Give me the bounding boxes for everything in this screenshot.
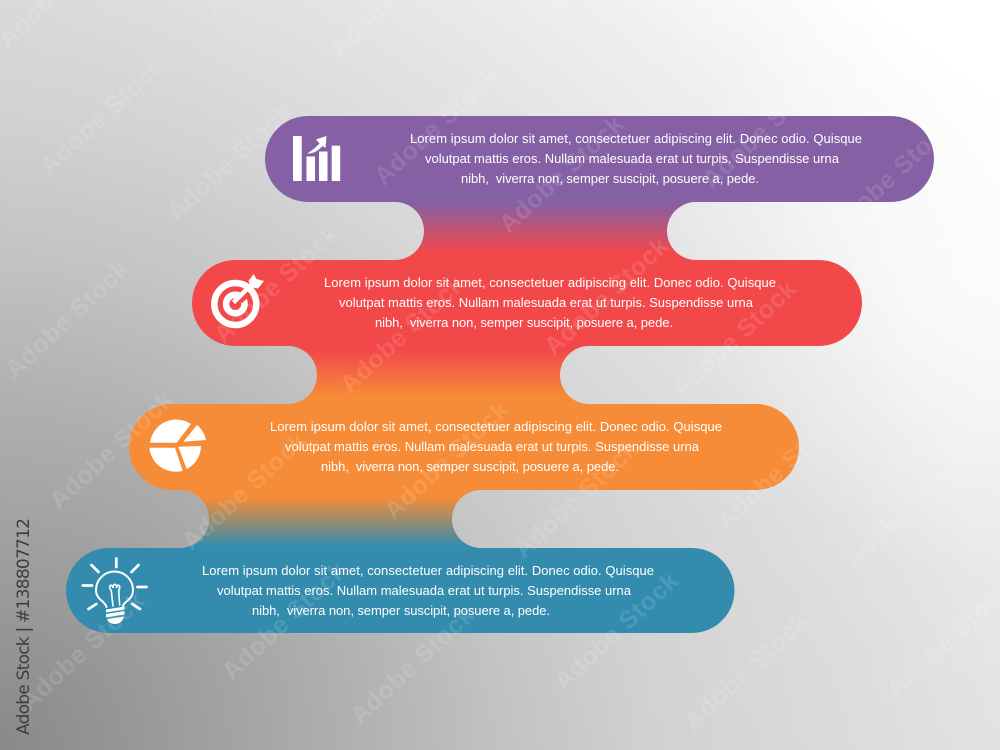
panel 3 text: Lorem ipsum dolor sit amet, consectetuer adipiscing elit. Donec odio. Quisque xyxy=(270,419,722,434)
watermarks: Adobe Stock xyxy=(697,65,832,194)
panel 1 text: nibh, viverra non, semper suscipit, posuere a, pede. xyxy=(461,171,759,186)
watermarks: Adobe Stock xyxy=(494,110,629,239)
panel 3 text: volutpat mattis eros. Nullam malesuada erat ut turpis. Suspendisse urna xyxy=(285,439,700,454)
stock id label: Adobe Stock | #138807712 xyxy=(14,518,34,735)
panel 1 text xyxy=(410,131,862,186)
watermarks: Adobe Stock xyxy=(539,232,674,361)
panel 1 text: volutpat mattis eros. Nullam malesuada erat ut turpis. Suspendisse urna xyxy=(425,151,840,166)
watermarks: Adobe Stock xyxy=(162,98,297,227)
panel 4 text: nibh, viverra non, semper suscipit, posuere a, pede. xyxy=(252,603,550,618)
watermarks: Adobe Stock xyxy=(379,396,514,525)
watermarks: Adobe Stock xyxy=(217,557,352,686)
watermarks: Adobe Stock xyxy=(15,587,150,716)
watermarks: Adobe Stock xyxy=(509,435,644,564)
watermarks: Adobe Stock xyxy=(44,386,179,515)
icon: light bulb xyxy=(83,558,146,624)
panel 2 text xyxy=(324,275,776,330)
panel 3 text: nibh, viverra non, semper suscipit, posuere a, pede. xyxy=(321,459,619,474)
icon: target with arrow xyxy=(214,274,264,325)
watermarks: Adobe Stock xyxy=(679,607,814,736)
watermarks: Adobe Stock xyxy=(549,567,684,696)
watermarks: Adobe Stock xyxy=(335,270,470,399)
panel 2 text: volutpat mattis eros. Nullam malesuada erat ut turpis. Suspendisse urna xyxy=(339,295,754,310)
watermarks: Adobe Stock xyxy=(839,446,974,575)
watermarks: Adobe Stock xyxy=(209,220,344,349)
watermarks: Adobe Stock xyxy=(345,601,480,730)
panel 2 text: Lorem ipsum dolor sit amet, consectetuer adipiscing elit. Donec odio. Quisque xyxy=(324,275,776,290)
watermarks: Adobe Stock xyxy=(0,255,135,384)
watermarks: Adobe Stock xyxy=(667,275,802,404)
icon: pie chart xyxy=(149,420,206,472)
panel 3 text xyxy=(270,419,722,474)
watermarks: Adobe Stock xyxy=(177,427,312,556)
panel 4 text: Lorem ipsum dolor sit amet, consectetuer adipiscing elit. Donec odio. Quisque xyxy=(202,563,654,578)
panel 2 text: nibh, viverra non, semper suscipit, posuere a, pede. xyxy=(375,315,673,330)
stacked ribbon shape xyxy=(66,116,934,633)
panel 4 text: volutpat mattis eros. Nullam malesuada erat ut turpis. Suspendisse urna xyxy=(217,583,632,598)
watermarks: Adobe Stock xyxy=(369,62,504,191)
panel 1 text: Lorem ipsum dolor sit amet, consectetuer adipiscing elit. Donec odio. Quisque xyxy=(410,131,862,146)
panel 4 text xyxy=(202,563,654,618)
watermarks: Adobe Stock xyxy=(35,52,170,181)
icon: rising bar chart xyxy=(293,136,340,181)
watermarks: Adobe Stock xyxy=(824,112,959,241)
watermarks: Adobe Stock xyxy=(712,406,847,535)
